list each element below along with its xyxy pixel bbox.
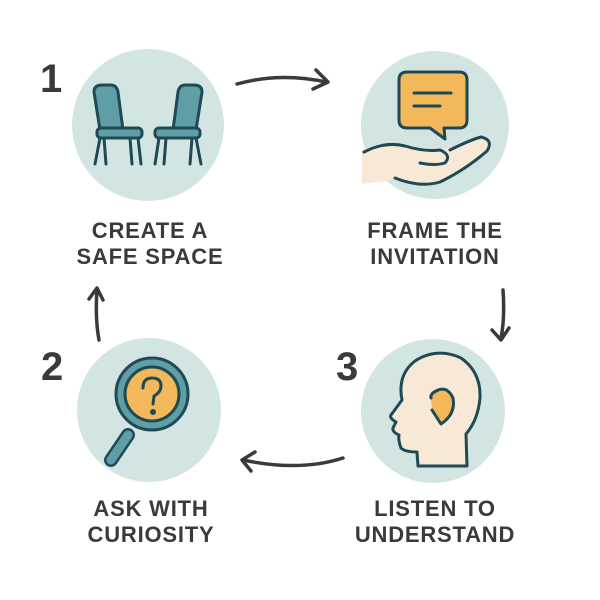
icon: magnifying glass with question mark <box>111 358 188 460</box>
label 1: SAFE SPACE <box>77 244 223 269</box>
arrow top <box>237 70 328 89</box>
step 3 circle: listen to understand <box>361 339 505 483</box>
number 1: 1 <box>40 57 62 101</box>
label 4: CURIOSITY <box>88 522 214 547</box>
arrow right <box>492 290 509 340</box>
step 1 circle: create a safe space <box>72 49 224 201</box>
icon: chairs <box>94 85 202 164</box>
step 4 circle: ask with curiosity <box>77 338 221 482</box>
arrow bottom <box>242 452 343 471</box>
label 2: FRAME THE <box>367 218 503 243</box>
arrow left up <box>89 288 103 340</box>
labels <box>77 218 515 547</box>
icon: speech bubble on hand <box>362 72 489 185</box>
label 4: ASK WITH <box>93 496 209 521</box>
arrows <box>89 70 509 471</box>
number 3: 3 <box>336 345 358 389</box>
label 3: LISTEN TO <box>374 496 496 521</box>
label 2: INVITATION <box>370 244 500 269</box>
label 1: CREATE A <box>92 218 208 243</box>
step 2 circle: frame the invitation <box>361 51 509 199</box>
icon: head with ear <box>391 353 480 466</box>
label 3: UNDERSTAND <box>355 522 515 547</box>
number 2: 2 <box>41 345 63 389</box>
numbers <box>40 57 358 389</box>
